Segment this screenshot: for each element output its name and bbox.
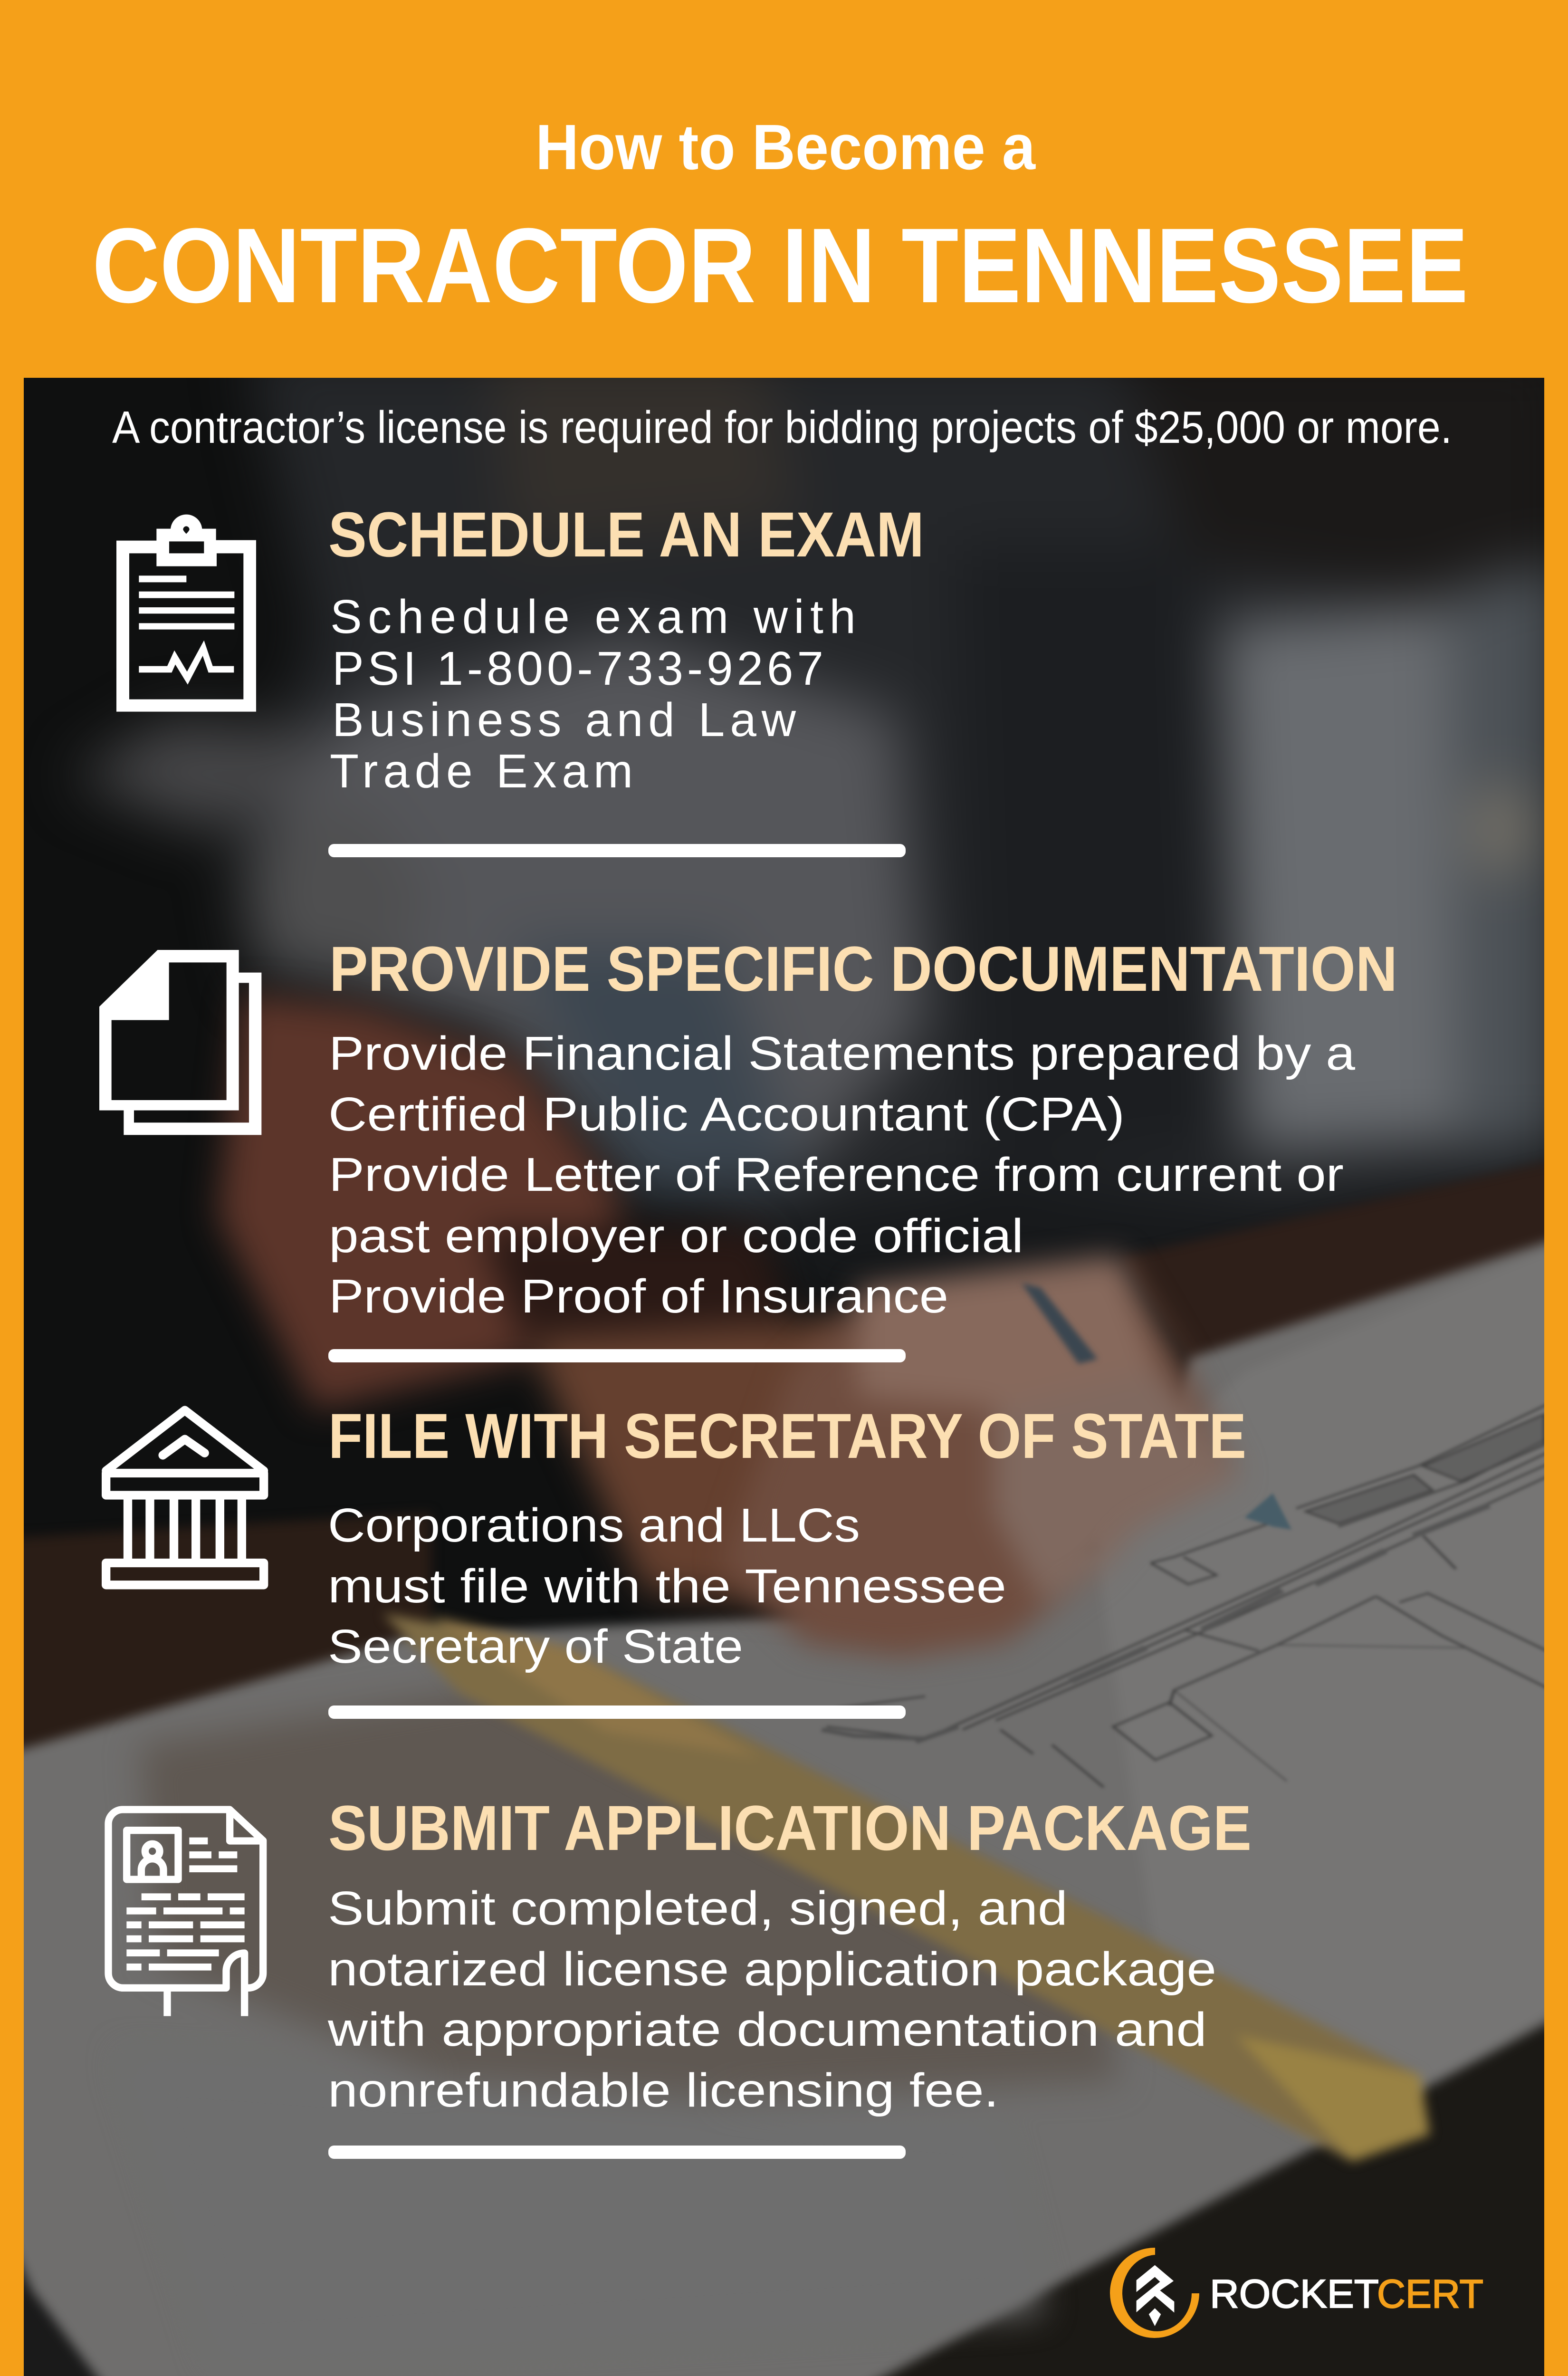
icon: government building (106, 1410, 264, 1585)
step 2 text: Provide Financial Statements prepared by a (329, 1027, 1355, 1080)
arm (218, 994, 625, 1409)
step 2 text: Provide Proof of Insurance (329, 1270, 948, 1323)
title (92, 111, 1468, 325)
icon: application form (108, 1810, 263, 2016)
step 3 text: Corporations and LLCs (328, 1499, 860, 1552)
ruler (382, 1613, 1430, 2162)
step 4 text (327, 1882, 1216, 2117)
step 1 text: Trade Exam (330, 745, 633, 798)
icon: clipboard (116, 515, 256, 712)
intro sentence: A contractor’s license is required for bidding projects of $25,000 or more. (112, 402, 1452, 453)
title line 1: How to Become a (535, 111, 1036, 183)
hand (722, 1255, 1240, 1657)
step 4 divider (328, 2146, 906, 2159)
step 2 divider (328, 1349, 906, 1362)
step 2 text: past employer or code official (329, 1209, 1023, 1263)
step 4 heading: SUBMIT APPLICATION PACKAGE (328, 1793, 1252, 1864)
step 3 divider (328, 1705, 906, 1719)
step 2 text (328, 1027, 1355, 1323)
pencil (1022, 1283, 1098, 1364)
bottom desk (800, 2013, 1566, 2376)
blueprint drawing lines (822, 1396, 1564, 1787)
logo rocket mark (1137, 2265, 1174, 2326)
logo: RocketCert: CERT (1377, 2271, 1483, 2316)
step 3 heading: FILE WITH SECRETARY OF STATE (328, 1401, 1246, 1472)
step 4 text: notarized license application package (328, 1943, 1216, 1996)
paper (0, 1236, 1566, 2376)
step 1 text (330, 590, 856, 798)
step 1 text: Schedule exam with (330, 590, 856, 643)
icon: documents (99, 950, 261, 1135)
step 4 text: nonrefundable licensing fee. (328, 2064, 999, 2117)
step 4 text: Submit completed, signed, and (328, 1882, 1068, 1935)
step 1 divider (328, 844, 906, 857)
step 1 text: Business and Law (332, 693, 796, 747)
step 4 text: with appropriate documentation and (327, 2003, 1207, 2056)
step 2 text: Certified Public Accountant (CPA) (328, 1088, 1125, 1141)
step 1 text: PSI 1-800-733-9267 (332, 642, 823, 695)
wood desk (1119, 1158, 1566, 1358)
step 3 text: Secretary of State (328, 1620, 743, 1673)
logo: RocketCert (1110, 2248, 1483, 2338)
logo wordmark: ROCKET (1210, 2271, 1379, 2316)
step 3 text (328, 1499, 1006, 1673)
step 1 heading: SCHEDULE AN EXAM (328, 499, 924, 570)
step 2 text: Provide Letter of Reference from current or (329, 1148, 1344, 1201)
logo ring (1110, 2248, 1199, 2338)
step 3 text: must file with the Tennessee (328, 1560, 1006, 1613)
step 2 heading: PROVIDE SPECIFIC DOCUMENTATION (329, 934, 1397, 1005)
